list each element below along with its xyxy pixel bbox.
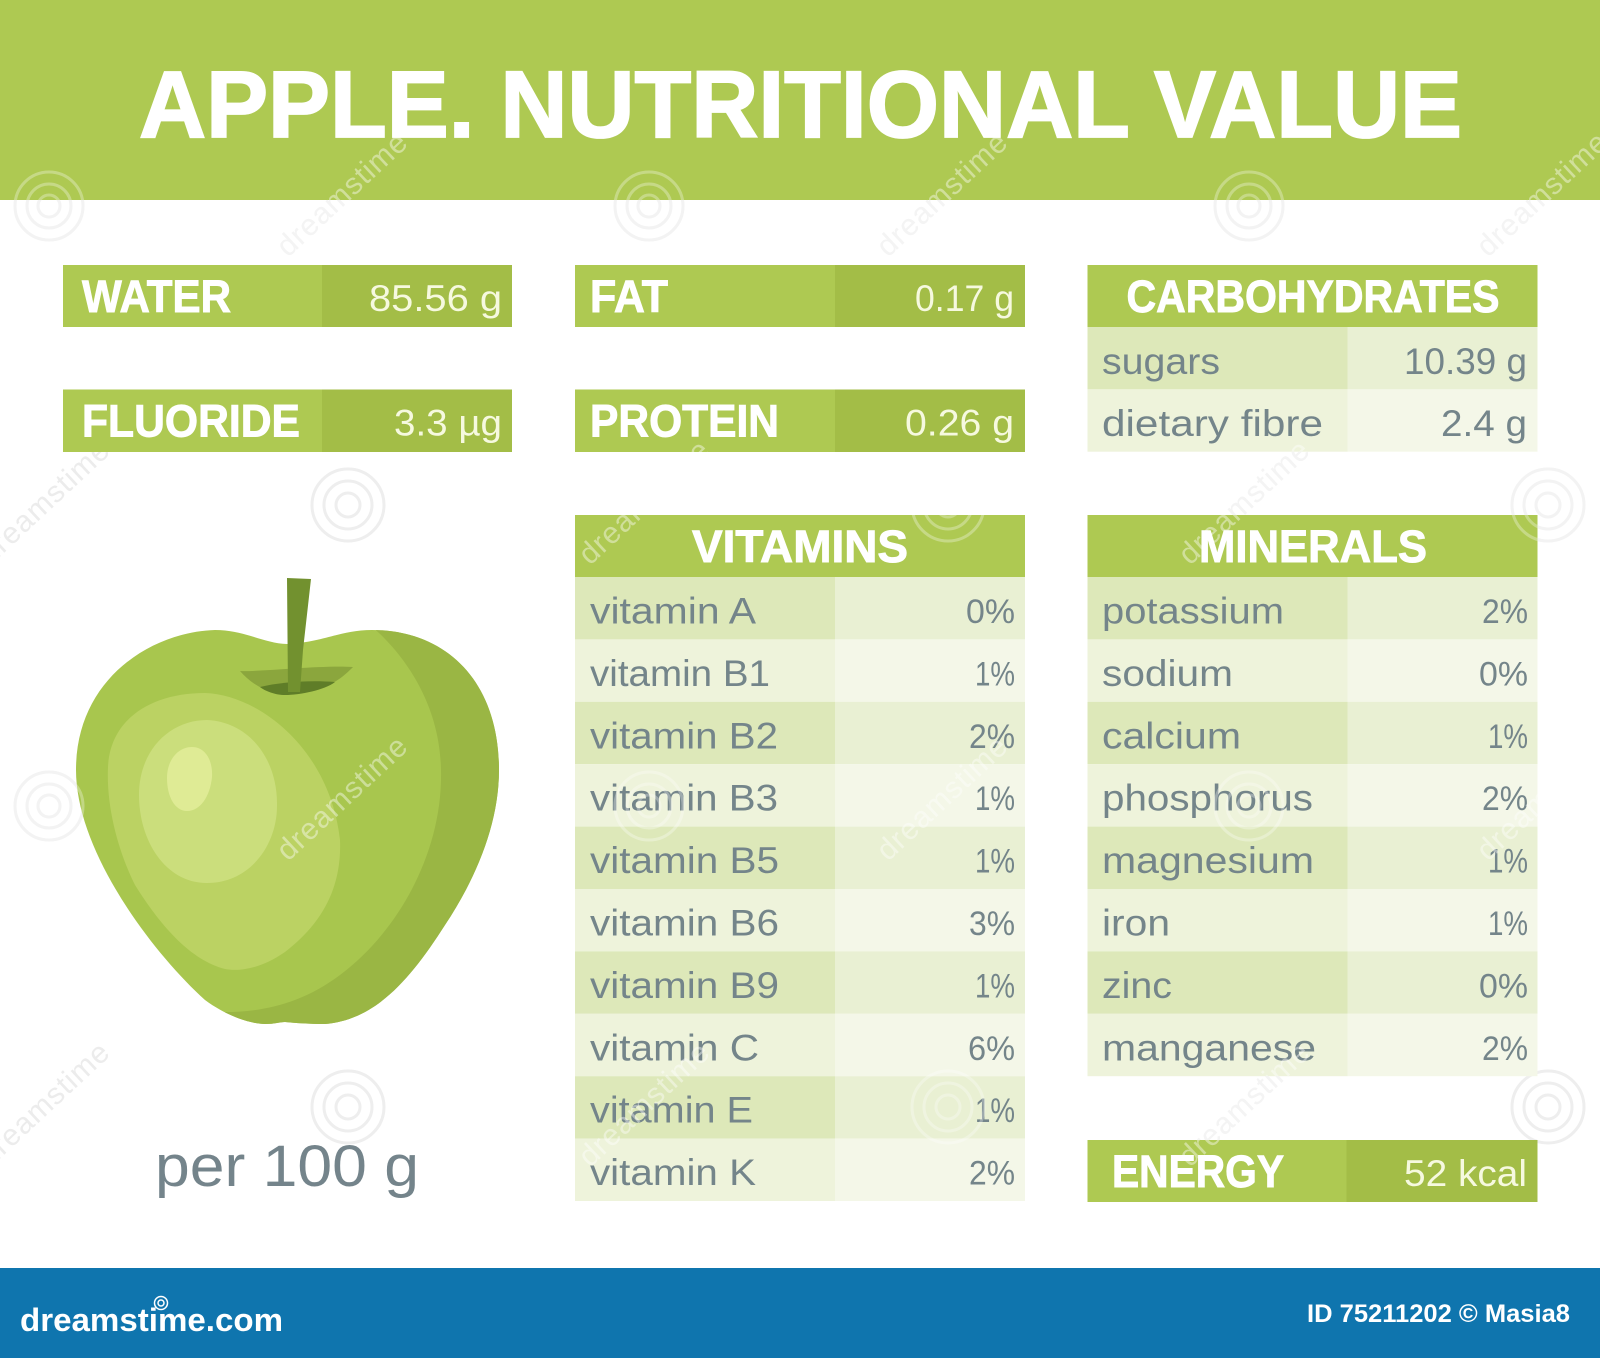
row: vitamin C: 6% xyxy=(968,1030,1015,1068)
text: dreamstime xyxy=(572,1035,717,1173)
row: manganese: manganese xyxy=(1102,1027,1316,1068)
row: vitamin B3: 1% xyxy=(975,780,1015,818)
row: sugars: sugars xyxy=(1102,341,1220,382)
bar: protein: PROTEIN xyxy=(590,396,779,446)
heading: carbohydrates: CARBOHYDRATES xyxy=(1126,271,1500,322)
text: dreamstime xyxy=(870,125,1015,263)
row: potassium: 2% xyxy=(1482,593,1528,631)
text: dreamstime xyxy=(572,1035,717,1173)
apple highlight inner xyxy=(139,720,277,883)
icon: green apple xyxy=(76,578,499,1024)
row: sodium: 0% xyxy=(1479,655,1528,693)
bar: fat: FAT xyxy=(590,271,668,322)
bar: fat: 0.17 g xyxy=(915,278,1014,319)
row: vitamin B1 xyxy=(575,639,1025,702)
row: vitamin B2 xyxy=(575,702,1025,764)
row: iron: iron xyxy=(1102,902,1170,944)
row: sodium xyxy=(1088,639,1538,702)
row: vitamin B5: 1% xyxy=(975,843,1015,881)
row: phosphorus: phosphorus xyxy=(1102,778,1313,819)
row: zinc xyxy=(1088,951,1538,1014)
row: magnesium: magnesium xyxy=(1102,840,1314,881)
panel: vitamins xyxy=(575,515,1025,1201)
apple stem xyxy=(287,578,311,692)
bar: energy: ENERGY xyxy=(1112,1146,1284,1197)
row: vitamin B9: 1% xyxy=(975,967,1015,1005)
text: dreamstime xyxy=(270,125,415,263)
row: iron: 1% xyxy=(1488,905,1528,943)
text: dreamstime xyxy=(870,729,1015,867)
row: vitamin A xyxy=(575,577,1025,639)
row: phosphorus: 2% xyxy=(1482,780,1528,818)
heading: minerals: MINERALS xyxy=(1199,521,1427,572)
row: vitamin E: vitamin E xyxy=(590,1090,753,1131)
row: vitamin A: 0% xyxy=(966,593,1015,631)
bar: water xyxy=(63,265,512,327)
row: vitamin B2: 2% xyxy=(969,718,1015,756)
row: phosphorus xyxy=(1088,764,1538,827)
row: vitamin K xyxy=(575,1139,1025,1201)
bar: energy: 52 kcal xyxy=(1404,1153,1527,1194)
row: vitamin K: 2% xyxy=(969,1155,1015,1193)
footer image id: ID 75211202 © Masia8 xyxy=(1307,1300,1570,1328)
text: dreamstime xyxy=(270,729,415,867)
caption: per 100 g: per 100 g xyxy=(155,1134,419,1199)
heading: vitamins: VITAMINS xyxy=(692,521,908,572)
title banner xyxy=(0,0,1600,200)
title: APPLE. NUTRITIONAL VALUE xyxy=(139,52,1462,158)
text: dreamstime xyxy=(1172,1035,1317,1173)
row: calcium xyxy=(1088,702,1538,764)
row: zinc: zinc xyxy=(1102,965,1172,1006)
row: zinc: 0% xyxy=(1479,967,1528,1005)
text: dreamstime xyxy=(572,433,717,571)
row: iron xyxy=(1088,889,1538,951)
bar: fluoride xyxy=(63,390,512,452)
row: vitamin B3 xyxy=(575,764,1025,827)
text: dreamstime xyxy=(270,125,415,263)
row: vitamin B5: vitamin B5 xyxy=(590,840,779,881)
text: dreamstime xyxy=(870,125,1015,263)
row: vitamin B9: vitamin B9 xyxy=(590,965,779,1006)
text: dreamstime xyxy=(1172,1035,1317,1173)
bar: fat xyxy=(575,265,1025,327)
panel: carbohydrates xyxy=(1088,265,1538,452)
row: vitamin C: vitamin C xyxy=(590,1027,759,1068)
row: magnesium: 1% xyxy=(1488,843,1528,881)
row: vitamin B9 xyxy=(575,951,1025,1014)
row: sugars xyxy=(1088,327,1538,389)
bar: energy xyxy=(1088,1140,1538,1202)
apple highlight outer xyxy=(108,693,340,970)
row: vitamin C xyxy=(575,1014,1025,1076)
row: manganese xyxy=(1088,1014,1538,1076)
text: dreamstime xyxy=(1172,433,1317,571)
row: manganese: 2% xyxy=(1482,1030,1528,1068)
row: vitamin B5 xyxy=(575,827,1025,889)
text: dreamstime xyxy=(1172,433,1317,571)
row: dietary fibre: dietary fibre xyxy=(1102,403,1323,444)
bar: water: WATER xyxy=(82,271,231,322)
bar: protein xyxy=(575,390,1025,452)
row: vitamin B6: vitamin B6 xyxy=(590,902,779,944)
footer bar xyxy=(0,1268,1600,1358)
row: vitamin B1: 1% xyxy=(975,655,1015,693)
row: vitamin B2: vitamin B2 xyxy=(590,715,778,756)
bar: fluoride: FLUORIDE xyxy=(82,396,300,446)
row: sodium: sodium xyxy=(1102,653,1233,694)
row: vitamin E xyxy=(575,1076,1025,1139)
icon: logo spiral xyxy=(154,1296,168,1310)
row: dietary fibre xyxy=(1088,389,1538,452)
row: potassium: potassium xyxy=(1102,590,1284,632)
apple dimple shadow xyxy=(240,667,353,693)
row: vitamin B3: vitamin B3 xyxy=(590,778,778,819)
row: calcium: calcium xyxy=(1102,715,1241,756)
apple glint xyxy=(167,747,212,811)
row: magnesium xyxy=(1088,827,1538,889)
apple dimple core xyxy=(260,681,335,695)
row: vitamin B6: 3% xyxy=(969,905,1015,943)
row: vitamin K: vitamin K xyxy=(590,1152,756,1193)
apple body xyxy=(76,630,499,1024)
row: dietary fibre: 2.4 g xyxy=(1441,403,1527,444)
row: calcium: 1% xyxy=(1488,718,1528,756)
apple shaded side xyxy=(225,630,499,1024)
bar: fluoride: 3.3 µg xyxy=(394,402,502,444)
row: potassium xyxy=(1088,577,1538,639)
panel: minerals xyxy=(1088,515,1538,1076)
row: vitamin E: 1% xyxy=(975,1092,1015,1130)
row: sugars: 10.39 g xyxy=(1404,341,1527,382)
row: vitamin A: vitamin A xyxy=(590,590,756,632)
bar: protein: 0.26 g xyxy=(905,402,1014,444)
row: vitamin B6 xyxy=(575,889,1025,951)
bar: water: 85.56 g xyxy=(369,278,502,319)
row: vitamin B1: vitamin B1 xyxy=(590,653,770,694)
footer logo text: dreamstime.com xyxy=(20,1302,283,1338)
